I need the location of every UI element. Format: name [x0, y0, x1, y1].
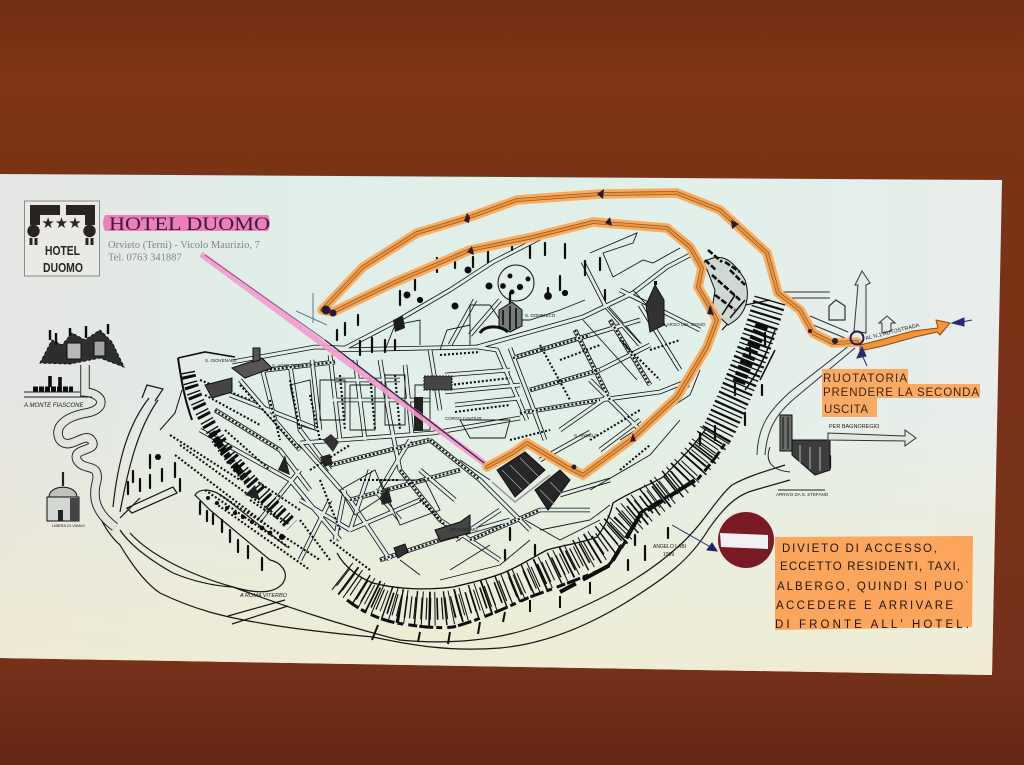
- Bagnoregio road arrow: [828, 430, 916, 446]
- note: roundabout instruction: [822, 369, 980, 417]
- route inner colour: [322, 193, 857, 475]
- Duomo cathedral: [492, 452, 570, 510]
- small map labels: [23, 313, 920, 599]
- small map labels: LIBERA DI VIANO: [52, 523, 85, 528]
- small map labels: S. ANGELO: [574, 433, 599, 438]
- title: HOTEL DUOMO: [109, 214, 270, 235]
- blue arrow pointing to exit: [952, 318, 972, 326]
- orange driving route: [322, 189, 950, 475]
- churches and small buildings: [205, 316, 470, 558]
- street-side dense ink: [170, 320, 690, 570]
- logo wordmark: HOTEL: [45, 243, 80, 258]
- small map labels: A ROMA VITERBO: [239, 593, 288, 599]
- tower and village near Bagnoregio road: [768, 415, 830, 490]
- exit arrow to motorway: [860, 320, 950, 351]
- cross mark: [296, 293, 327, 325]
- hotel logo: [24, 201, 100, 276]
- fortress tower: [646, 281, 664, 332]
- small map labels: S. AGOSTINO: [272, 363, 302, 368]
- Madonna church illustration: [47, 472, 79, 521]
- side road junction: [757, 292, 855, 455]
- logo stars: ★★★: [41, 214, 82, 232]
- small map labels: AL N.1 AUTOSTRADA: [865, 323, 920, 342]
- note: access restriction: ECCETTO RESIDENTI, TAXI,: [780, 561, 960, 573]
- blue arrow pointing to roundabout: [857, 347, 867, 366]
- small map labels: PRAVISSIMO: [450, 527, 478, 532]
- small map labels: S. DOMENICO: [525, 313, 556, 318]
- Fortezza gardens: [704, 250, 747, 325]
- small map labels: S. GIOVENALE: [205, 358, 237, 363]
- hotel address: Tel. 0763 341887: [108, 252, 182, 264]
- small house arrow: [829, 300, 845, 320]
- small map labels: LARGO DEL GENIO: [664, 322, 706, 327]
- west terrace and hairpin trees: [128, 238, 830, 570]
- small map labels: ANGELO LABI: [653, 544, 686, 550]
- route direction markers: [322, 189, 838, 470]
- note: access restriction: DIVIETO DI ACCESSO,: [782, 543, 937, 555]
- church of San Domenico: [480, 302, 522, 333]
- thin block outlines: [290, 233, 700, 580]
- no entry road sign: [718, 512, 774, 568]
- note: roundabout instruction: PRENDERE LA SECONDA: [823, 387, 979, 399]
- route core: [322, 193, 857, 475]
- south cliff band: [337, 427, 727, 644]
- hand-drawn map of Orvieto: [24, 233, 916, 649]
- small map labels: ARRIVO DA S. STEFANO: [776, 492, 829, 497]
- cliff east dark area: [716, 300, 775, 435]
- note: access restriction: DI FRONTE ALL' HOTEL.: [775, 619, 969, 631]
- snake road to Montefiascone: [24, 365, 115, 527]
- roundabout circle: [850, 332, 864, 344]
- small exit arrow: [879, 316, 895, 333]
- pink pointer line to hotel: [201, 254, 488, 466]
- note: roundabout instruction: RUOTATORIA: [823, 373, 907, 385]
- western cliff: [127, 352, 292, 525]
- note: access restriction: [775, 536, 973, 631]
- arrow to no entry sign: [672, 525, 717, 551]
- paper sheet: [0, 174, 1002, 675]
- pink highlighter on hotel name: [103, 215, 270, 231]
- small map labels: 1969: [663, 552, 674, 558]
- circular grove: [404, 265, 568, 309]
- town plateau streets: [200, 238, 700, 560]
- hairpin tree row: [155, 454, 285, 540]
- Montefiascone hill village: [33, 324, 124, 389]
- route outer highlight: [322, 193, 857, 475]
- north arrow road to Porta Romana: [854, 271, 870, 333]
- logo wordmark second line: DUOMO: [43, 260, 83, 275]
- note: access restriction: ALBERGO, QUINDI SI PUO`: [777, 581, 969, 593]
- note: access restriction: ACCEDERE E ARRIVARE: [776, 600, 953, 612]
- small map labels: PER BAGNOREGIO: [829, 424, 880, 430]
- small map labels: A MONTE FIASCONE: [23, 403, 84, 409]
- outer road: [100, 385, 790, 649]
- Torre del Moro tower: [414, 376, 452, 431]
- small map labels: CORSO CAVOUR: [445, 416, 482, 421]
- hotel address: Orvieto (Terni) - Vicolo Maurizio, 7: [108, 240, 260, 251]
- note: roundabout instruction: USCITA: [824, 404, 868, 416]
